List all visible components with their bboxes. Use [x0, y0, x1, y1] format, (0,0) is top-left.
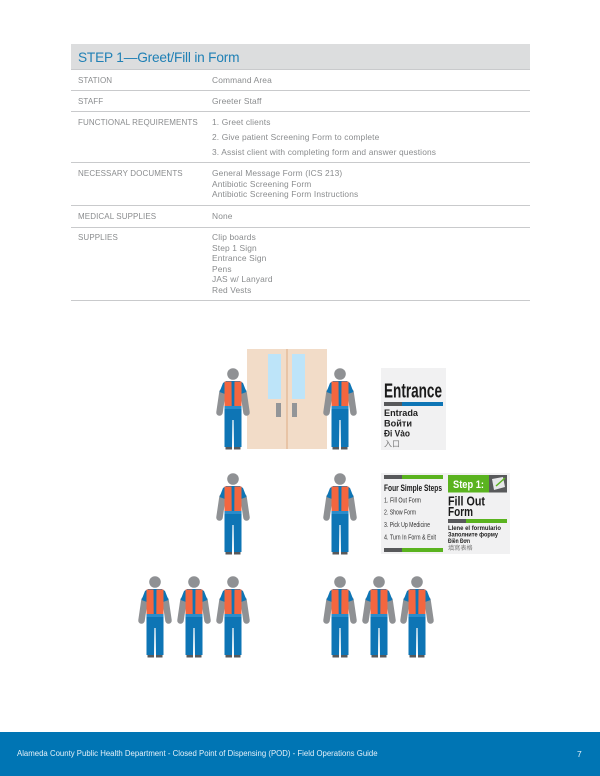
- row value: supplies: Red Vests: [212, 285, 251, 295]
- row value: supplies: Entrance Sign: [212, 253, 266, 263]
- row value: supplies: Step 1 Sign: [212, 243, 257, 253]
- sign: step 1 fill out form: Step 1:: [453, 479, 484, 491]
- sign: entrance: Đi Vào: [384, 428, 410, 438]
- table heading: STEP 1—Greet/Fill in Form: [78, 50, 239, 65]
- row value: functional requirements: 3. Assist client with completing form and answer questions: [212, 147, 436, 157]
- sign: entrance: Entrance: [384, 380, 442, 402]
- sign: entrance: Войти: [384, 418, 412, 428]
- row value: necessary documents: Antibiotic Screening Form Instructions: [212, 189, 358, 199]
- sign: step 1 fill out form: Form: [448, 504, 473, 519]
- sign: four simple steps: Four Simple Steps: [384, 483, 442, 493]
- row value: necessary documents: Antibiotic Screening Form: [212, 179, 311, 189]
- sign: step 1 fill out form: 填寫表格: [448, 544, 474, 552]
- sign: step 1 fill out form: [446, 473, 510, 554]
- sign: step 1 fill out form: Заполните форму: [448, 532, 499, 538]
- sign: four simple steps: 3. Pick Up Medicine: [384, 520, 430, 529]
- staff figure: third row 5: [366, 576, 392, 658]
- row value: station: Command Area: [212, 75, 272, 85]
- row value: necessary documents: [212, 168, 358, 199]
- row value: staff: Greeter Staff: [212, 96, 262, 106]
- staff figure: second row left: [220, 473, 246, 554]
- row value: functional requirements: [212, 117, 436, 157]
- table heading: [71, 44, 530, 70]
- row label: staff: STAFF: [78, 96, 103, 106]
- table: step 1 details: [71, 44, 530, 301]
- row value: supplies: [212, 232, 273, 295]
- icon: form and pencil: [489, 475, 507, 492]
- row value: medical supplies: None: [212, 211, 233, 221]
- page number: 7: [577, 749, 582, 759]
- row label: medical supplies: MEDICAL SUPPLIES: [78, 212, 156, 220]
- sign: four simple steps: 4. Turn In Form & Exit: [384, 532, 437, 542]
- footer text: Alameda County Public Health Department - Closed Point of Dispensing (POD) - Field Operations Guide: [17, 749, 378, 758]
- footer bar: [0, 732, 600, 776]
- staff figure: door right: [326, 368, 354, 450]
- sign: entrance: [381, 368, 446, 450]
- row value: supplies: Clip boards: [212, 232, 256, 242]
- row label: necessary documents: NECESSARY DOCUMENTS: [78, 168, 183, 178]
- row value: functional requirements: 2. Give patient Screening Form to complete: [212, 132, 379, 142]
- staff figure: third row 3: [220, 576, 246, 658]
- row label: supplies: SUPPLIES: [78, 232, 118, 242]
- double doors: [247, 349, 327, 449]
- sign: step 1 fill out form: Llene el formulario: [448, 525, 501, 532]
- sign: entrance: Entrada: [384, 408, 419, 418]
- staff figure: third row 1: [142, 576, 168, 658]
- sign: four simple steps: [381, 473, 446, 554]
- sign: step 1 fill out form: Fill Out: [448, 494, 486, 508]
- row label: station: STATION: [78, 76, 112, 84]
- staff figure: third row 6: [404, 576, 430, 658]
- sign: entrance: 入口: [384, 440, 400, 448]
- staff figure: third row 4: [326, 576, 354, 658]
- sign: four simple steps: 1. Fill Out Form: [384, 496, 421, 504]
- row label: functional requirements: FUNCTIONAL REQUIREMENTS: [78, 118, 198, 126]
- staff figure: door left: [220, 368, 246, 450]
- staff figure: second row right: [326, 473, 354, 554]
- sign: step 1 fill out form: Điền Đơn: [448, 538, 470, 545]
- sign: four simple steps: 2. Show Form: [384, 508, 416, 516]
- row value: functional requirements: 1. Greet clients: [212, 117, 271, 127]
- row value: necessary documents: General Message Form (ICS 213): [212, 168, 342, 178]
- staff figure: third row 2: [180, 576, 208, 658]
- row value: supplies: JAS w/ Lanyard: [212, 274, 273, 284]
- row value: supplies: Pens: [212, 264, 232, 274]
